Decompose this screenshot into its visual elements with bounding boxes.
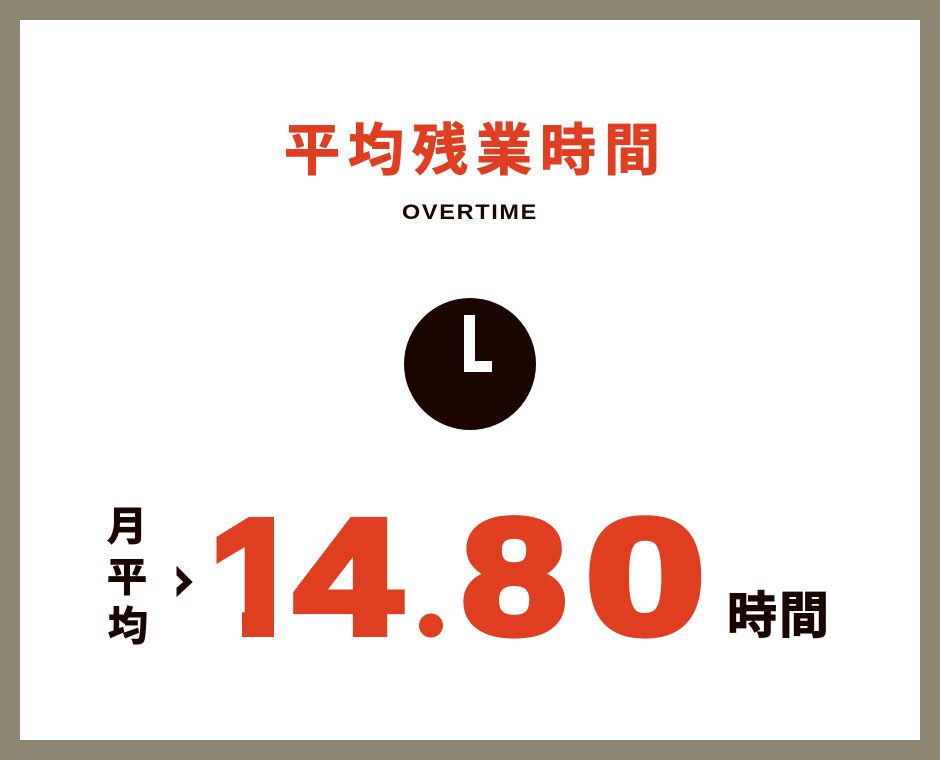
unit: hours: 時間	[727, 588, 831, 644]
label: monthly average	[107, 505, 148, 649]
big number: 14.80	[216, 515, 702, 639]
big number: 14.80: 1	[209, 487, 304, 668]
label: monthly average: 平	[107, 556, 147, 600]
subtitle: OVERTIME	[402, 201, 538, 224]
big number: 14.80: 8	[462, 486, 566, 668]
title: 平均残業時間	[284, 119, 668, 182]
icon: clock	[404, 298, 536, 430]
big number: 14.80: 4	[295, 485, 401, 668]
big number: 14.80: 0	[586, 486, 705, 668]
label: monthly average: 均	[108, 605, 148, 649]
icon: chevron arrow	[177, 567, 192, 596]
label: monthly average: 月	[107, 505, 147, 549]
